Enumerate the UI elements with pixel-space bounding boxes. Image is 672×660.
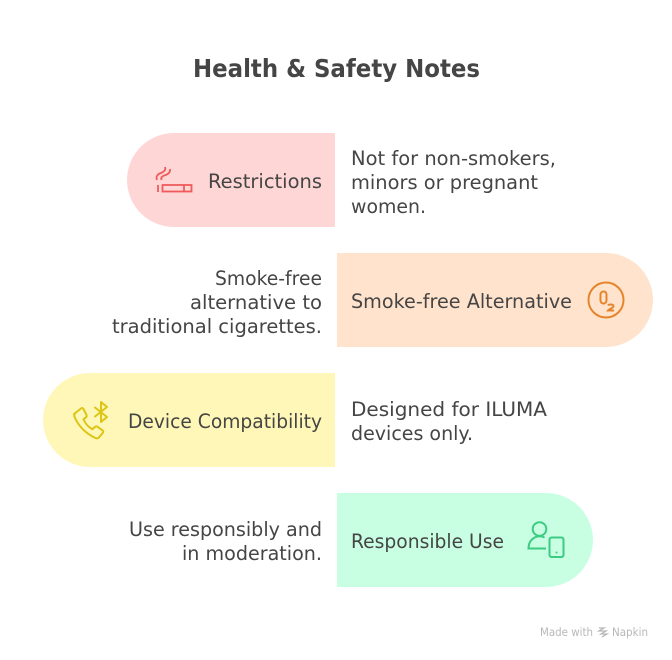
description: responsible use: Use responsibly and <box>129 518 322 541</box>
description: smoke-free alternative <box>112 267 322 338</box>
pill: restrictions <box>127 133 335 227</box>
description: smoke-free alternative: Smoke-free <box>215 267 322 290</box>
footer: made with napkin: Made with <box>540 625 593 639</box>
description: restrictions: women. <box>351 195 426 218</box>
label: smoke-free alternative: Smoke-free Alternative <box>351 290 572 313</box>
description: restrictions: Not for non-smokers, <box>351 147 556 170</box>
panel: responsible use <box>129 493 593 587</box>
label: responsible use: Responsible Use <box>351 530 504 553</box>
description: smoke-free alternative: alternative to <box>190 291 322 314</box>
icon: napkin logo <box>599 628 607 637</box>
icon: O2 <box>588 282 624 318</box>
pill: responsible use <box>337 493 593 587</box>
icon: person and phone <box>528 522 564 557</box>
description: device compatibility <box>351 398 548 445</box>
footer: made with napkin <box>540 625 648 639</box>
panel: restrictions <box>127 133 556 227</box>
footer: made with napkin: Napkin <box>612 625 648 639</box>
label: restrictions: Restrictions <box>208 170 322 193</box>
panel: smoke-free alternative <box>112 253 653 347</box>
description: responsible use: in moderation. <box>182 542 322 565</box>
description: restrictions: minors or pregnant <box>351 171 538 194</box>
panel: device compatibility <box>43 373 548 467</box>
pill: device compatibility <box>43 373 335 467</box>
description: smoke-free alternative: traditional cigarettes. <box>112 315 322 338</box>
description: device compatibility: devices only. <box>351 422 473 445</box>
description: responsible use <box>129 518 322 565</box>
title: Health & Safety Notes <box>193 54 480 83</box>
icon: cigarette <box>157 167 192 192</box>
pill: smoke-free alternative <box>337 253 653 347</box>
label: device compatibility: Device Compatibility <box>128 410 322 433</box>
description: restrictions <box>351 147 556 218</box>
icon: bluetooth phone <box>74 402 107 438</box>
description: device compatibility: Designed for ILUMA <box>351 398 548 421</box>
